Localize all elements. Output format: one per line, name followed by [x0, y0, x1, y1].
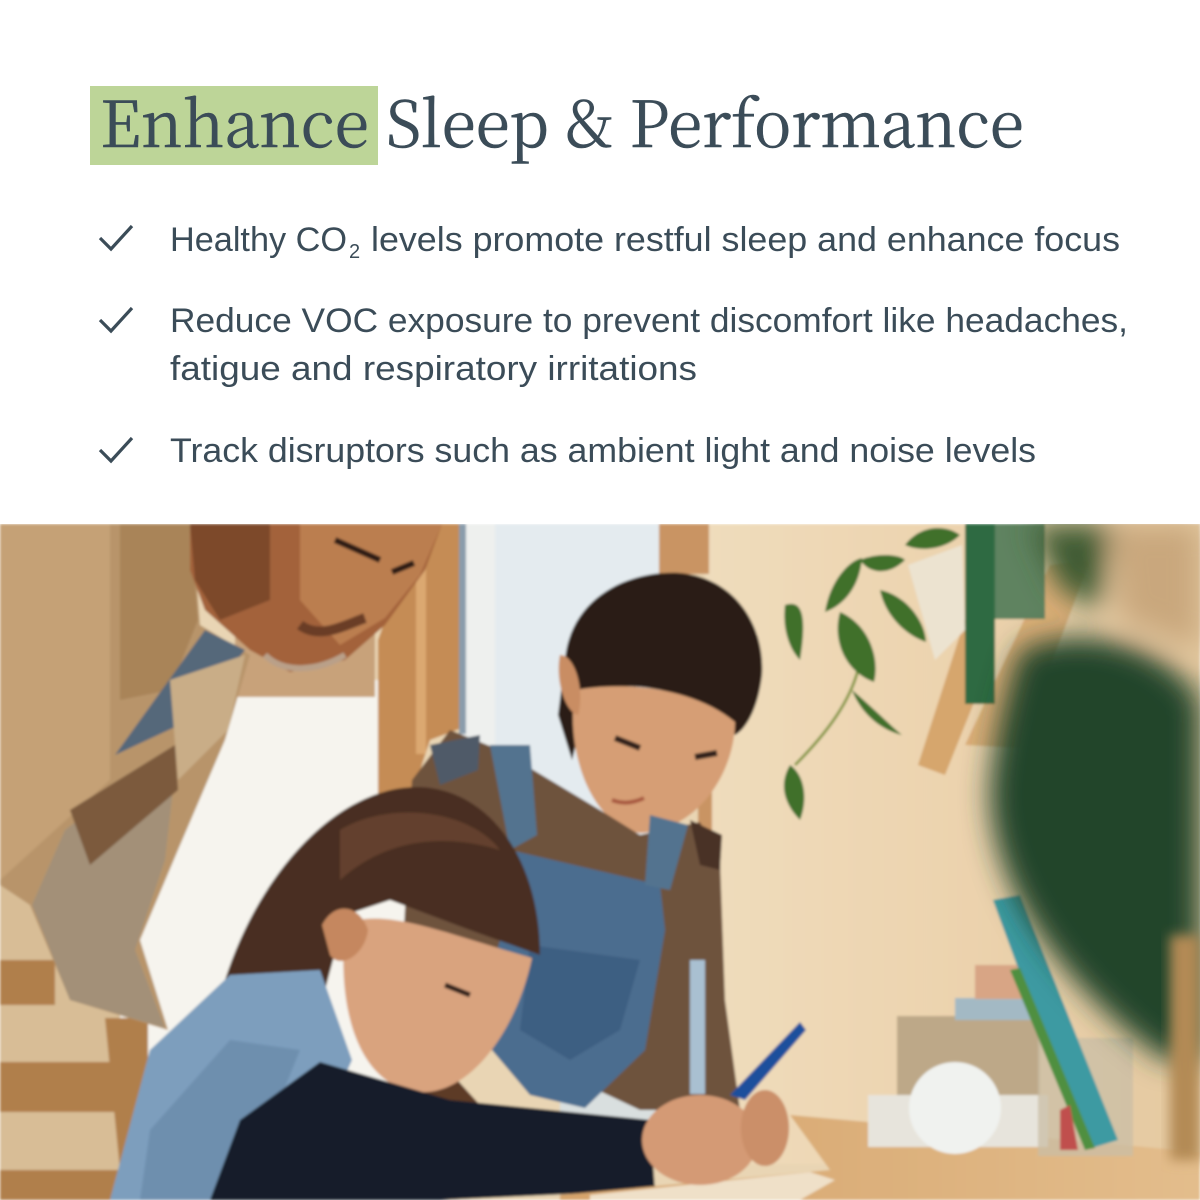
title highlight: [90, 86, 378, 165]
small girl sleeve: [210, 1062, 655, 1200]
checklist: [100, 221, 1128, 470]
icon: check 1: [100, 226, 132, 249]
small girl face: [343, 918, 532, 1092]
shelf: [964, 564, 1080, 747]
bullet 1: levels promote restful sleep and enhance focus: [371, 221, 1120, 259]
photo: father and daughters at desk: [0, 524, 1200, 1200]
plant stem: [795, 670, 858, 765]
title: [90, 74, 1024, 166]
blue pen: [730, 1022, 806, 1100]
small girl vest: [110, 970, 352, 1200]
device: [909, 1062, 1001, 1154]
icon: check 3: [100, 438, 132, 461]
paper: [590, 1172, 835, 1200]
foreground blurred leaves: [990, 524, 1200, 1060]
bullet 2 line 1: Reduce VOC exposure to prevent discomfort like headaches,: [170, 302, 1128, 340]
left curtain: [0, 885, 120, 1172]
bullet 2 line 2: fatigue and respiratory irritations: [170, 350, 697, 388]
bullet 1: [170, 221, 1120, 263]
desk: [560, 1115, 1200, 1200]
pencil cup: [1038, 1038, 1133, 1156]
bullet 1: Healthy CO: [170, 221, 347, 259]
title word: Enhance: Enhance: [100, 74, 369, 166]
window blind: [235, 625, 375, 697]
older girl hair: [558, 573, 762, 760]
hands: [642, 1095, 758, 1185]
pencil: [690, 960, 705, 1094]
books and box: [896, 1015, 1040, 1096]
older girl overalls: [475, 850, 665, 1108]
father shirt: [0, 524, 250, 1030]
plant pot: [908, 545, 965, 660]
older girl face: [573, 686, 735, 833]
bullet 3: Track disruptors such as ambient light and noise levels: [170, 432, 1036, 470]
father neck and face: [190, 524, 442, 672]
bullet 1: 2: [349, 241, 360, 263]
window frame: [378, 524, 462, 795]
blurred wooden post: [1170, 935, 1200, 1160]
window: [118, 678, 408, 1084]
chair: [0, 960, 148, 1200]
older girl sweater: [400, 730, 740, 1110]
title remainder: Sleep & Performance: [386, 74, 1024, 166]
wall: [196, 573, 830, 1200]
small girl hair: [225, 787, 540, 1010]
icon: check 2: [100, 308, 132, 331]
hanging plant: [784, 528, 960, 820]
